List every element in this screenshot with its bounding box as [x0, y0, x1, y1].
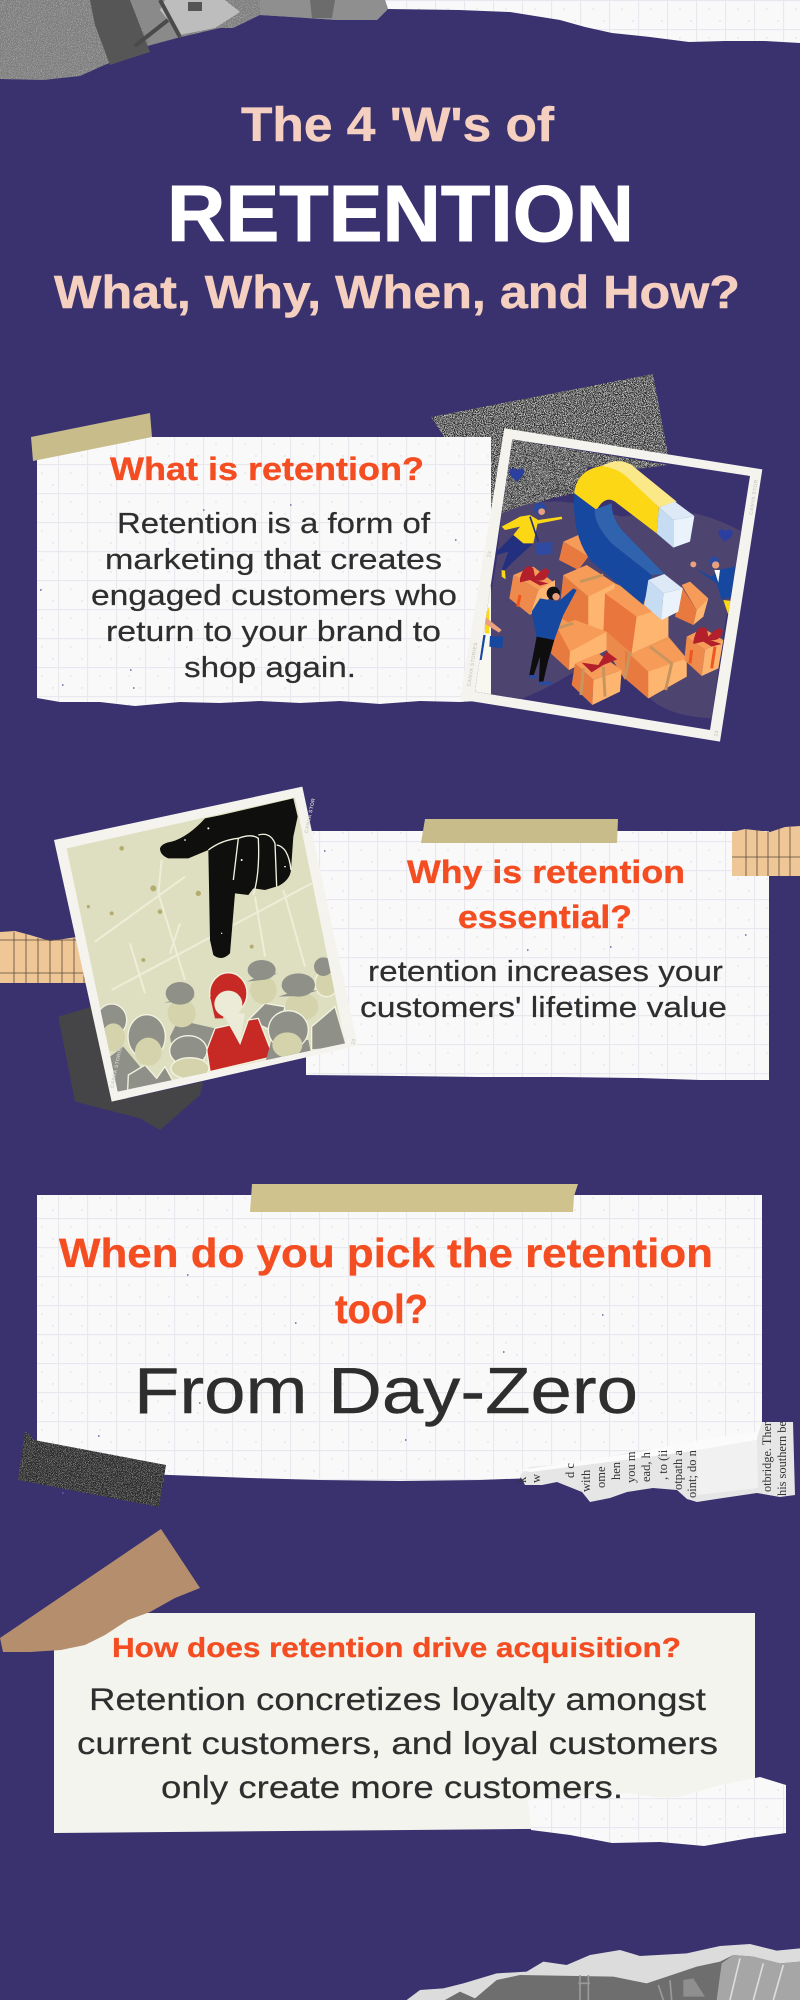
- torn newspaper: otpath a: [671, 1450, 685, 1490]
- photo: magnet attracting customers: [460, 428, 762, 742]
- text: why body: [360, 956, 727, 1024]
- tape: when panel: [250, 1184, 578, 1212]
- text: what body: return to your brand to: [106, 616, 441, 648]
- torn newspaper: [515, 1421, 795, 1502]
- text: what body: engaged customers who: [91, 580, 457, 612]
- texture: dark rock behind photo: [58, 1007, 203, 1130]
- photo: pointing hand over crowd: [54, 787, 358, 1130]
- tape: brown kraft paper: [0, 1529, 200, 1652]
- torn newspaper: hen: [609, 1461, 623, 1480]
- icon: frame captions: CANVA STORIES: [466, 642, 479, 687]
- text: why body: retention increases your: [368, 956, 724, 988]
- boxes: [509, 535, 723, 705]
- heading: when: When do you pick the retention: [59, 1230, 713, 1276]
- torn newspaper: his southern be: [775, 1421, 789, 1496]
- texture: dark fabric behind photo: [431, 374, 668, 520]
- torn newspaper: you m: [624, 1451, 638, 1483]
- torn photo: top left: [0, 0, 388, 80]
- tape: why panel left: [0, 931, 92, 983]
- torn graph paper: [528, 1777, 786, 1846]
- icon: frame captions: [109, 798, 358, 1089]
- title: What, Why, When, and How?: [54, 266, 740, 318]
- torn paper: top right: [225, 0, 800, 43]
- torn newspaper: otbridge. Ther: [760, 1421, 774, 1492]
- icon: frame captions: CANVA STORIES: [109, 1043, 125, 1089]
- text: what body: Retention is a form of: [117, 508, 430, 540]
- tape: what panel: [31, 413, 152, 461]
- torn newspaper: oint; do n: [685, 1449, 699, 1498]
- tape: dark fabric: [18, 1430, 166, 1507]
- text: how body: current customers, and loyal customers: [77, 1725, 718, 1761]
- icon: frame captions: [466, 479, 760, 737]
- hand: [160, 798, 298, 958]
- icon: frame captions: 23: [350, 1038, 358, 1045]
- icon: frame captions: CANVA STOR: [748, 479, 760, 515]
- torn photo: bottom right: [407, 1944, 800, 2000]
- icon: hearts: [509, 468, 733, 542]
- panel: what is retention: [37, 437, 491, 706]
- gift bows: [520, 566, 723, 672]
- heading: when: tool?: [335, 1286, 428, 1332]
- people: [497, 503, 738, 685]
- text: how body: only create more customers.: [161, 1769, 623, 1805]
- paper seen through frame: [475, 586, 491, 694]
- texture inside photo: [502, 439, 668, 513]
- tape: why panel right: [732, 826, 800, 876]
- panel: how does retention drive acquisition: [54, 1613, 786, 1846]
- magnet: [574, 461, 694, 620]
- torn newspaper: , to (ii: [656, 1449, 670, 1480]
- text: what body: [91, 508, 457, 684]
- text: what body: shop again.: [184, 652, 356, 684]
- torn newspaper: ead, h: [639, 1451, 653, 1482]
- text: what body: marketing that creates: [105, 544, 442, 576]
- panel: why is retention essential: [306, 831, 769, 1080]
- heading: how: How does retention drive acquisition?: [112, 1632, 681, 1663]
- heading: why: essential?: [458, 899, 632, 935]
- torn newspaper: k: [515, 1476, 529, 1483]
- title: RETENTION: [167, 169, 634, 258]
- scratches: [95, 860, 312, 993]
- text: why body: customers' lifetime value: [360, 992, 727, 1024]
- title: [54, 99, 740, 318]
- icon: frame captions: CANVA STOR: [304, 798, 317, 834]
- torn newspaper: with: [579, 1469, 593, 1492]
- torn newspaper: w: [529, 1474, 543, 1483]
- torn newspaper: ome: [594, 1466, 608, 1488]
- text: how body: [77, 1681, 718, 1805]
- heading: why: Why is retention: [407, 854, 685, 890]
- panel: when do you pick: [37, 1195, 762, 1493]
- text: from day-zero: From Day-Zero: [134, 1354, 638, 1427]
- heading: why: [407, 854, 685, 935]
- icon: frame captions: 23: [713, 730, 720, 737]
- text: how body: Retention concretizes loyalty amongst: [89, 1681, 706, 1717]
- title: The 4 'W's of: [241, 99, 555, 152]
- crowd: [97, 957, 347, 1093]
- torn newspaper: d c: [563, 1463, 577, 1478]
- tape: why panel top: [421, 819, 618, 843]
- icon: frame captions: 23: [486, 551, 493, 558]
- heading: when: [59, 1230, 713, 1332]
- heading: what: What is retention?: [110, 451, 424, 487]
